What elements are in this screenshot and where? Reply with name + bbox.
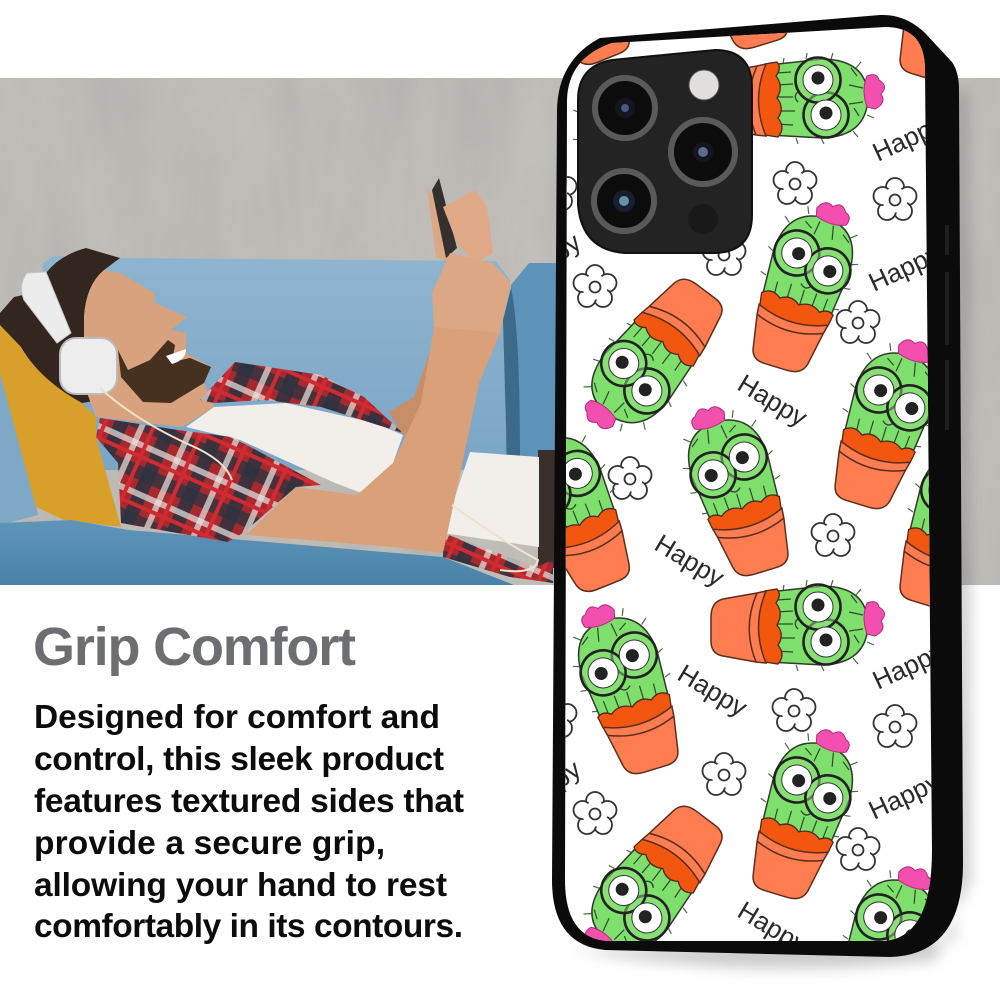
description text: features textured sides that [34, 783, 464, 820]
far forearm [389, 340, 434, 435]
beard [118, 340, 211, 403]
plaid shirt sleeve [96, 418, 321, 542]
camera module [578, 50, 752, 253]
lens right [671, 120, 735, 184]
description text: control, this sleek product [34, 741, 444, 778]
sofa [0, 256, 556, 585]
happy labels: Happy [868, 108, 949, 167]
near arm [246, 327, 500, 553]
hair [0, 248, 120, 403]
upper hand thumb [427, 187, 450, 262]
heading: Grip Comfort [33, 617, 356, 677]
description text: Designed for comfort and [34, 699, 440, 736]
plaid shirt collar [200, 362, 403, 433]
man [0, 178, 553, 583]
headphones [22, 272, 538, 571]
photo: man on sofa [0, 78, 1000, 585]
upper hand fingers [443, 190, 493, 263]
description text: provide a secure grip, [34, 825, 385, 862]
sofa seat [0, 520, 514, 585]
case body [552, 15, 963, 957]
happy labels: Happy [507, 754, 586, 821]
happy labels: Happy [868, 636, 949, 695]
printed back [565, 27, 932, 941]
happy labels: Happy [733, 895, 813, 959]
case shadow [575, 90, 970, 968]
description text: comfortably in its contours. [34, 908, 463, 945]
sofa left arm [0, 373, 38, 525]
lens top left [595, 78, 655, 138]
happy labels: Happy [864, 766, 945, 825]
jeans [538, 450, 556, 568]
concrete wall [0, 78, 1000, 585]
sofa right arm [505, 263, 556, 470]
happy labels: Happy [507, 227, 586, 294]
plaid shirt hem [443, 533, 553, 583]
flash [689, 70, 719, 100]
phone in hand [432, 178, 457, 258]
happy labels: Happy [650, 528, 730, 592]
flowers [534, 162, 916, 870]
happy labels: Happy [864, 238, 945, 297]
side buttons [945, 225, 949, 430]
happy labels [565, 30, 932, 941]
white t-shirt lower [443, 452, 539, 547]
face and neck [84, 270, 214, 427]
sofa back cushion [40, 256, 512, 470]
fist [432, 253, 511, 333]
white t-shirt chest [186, 403, 403, 500]
description text [34, 699, 464, 945]
yellow pillow [0, 323, 121, 527]
happy labels: Happy [673, 658, 753, 722]
lidar sensor [688, 204, 718, 234]
description text: allowing your hand to rest [34, 867, 447, 904]
happy labels: Happy [733, 368, 813, 432]
lens bottom left [594, 171, 654, 231]
phone case [552, 15, 977, 975]
cacti [566, 30, 930, 941]
